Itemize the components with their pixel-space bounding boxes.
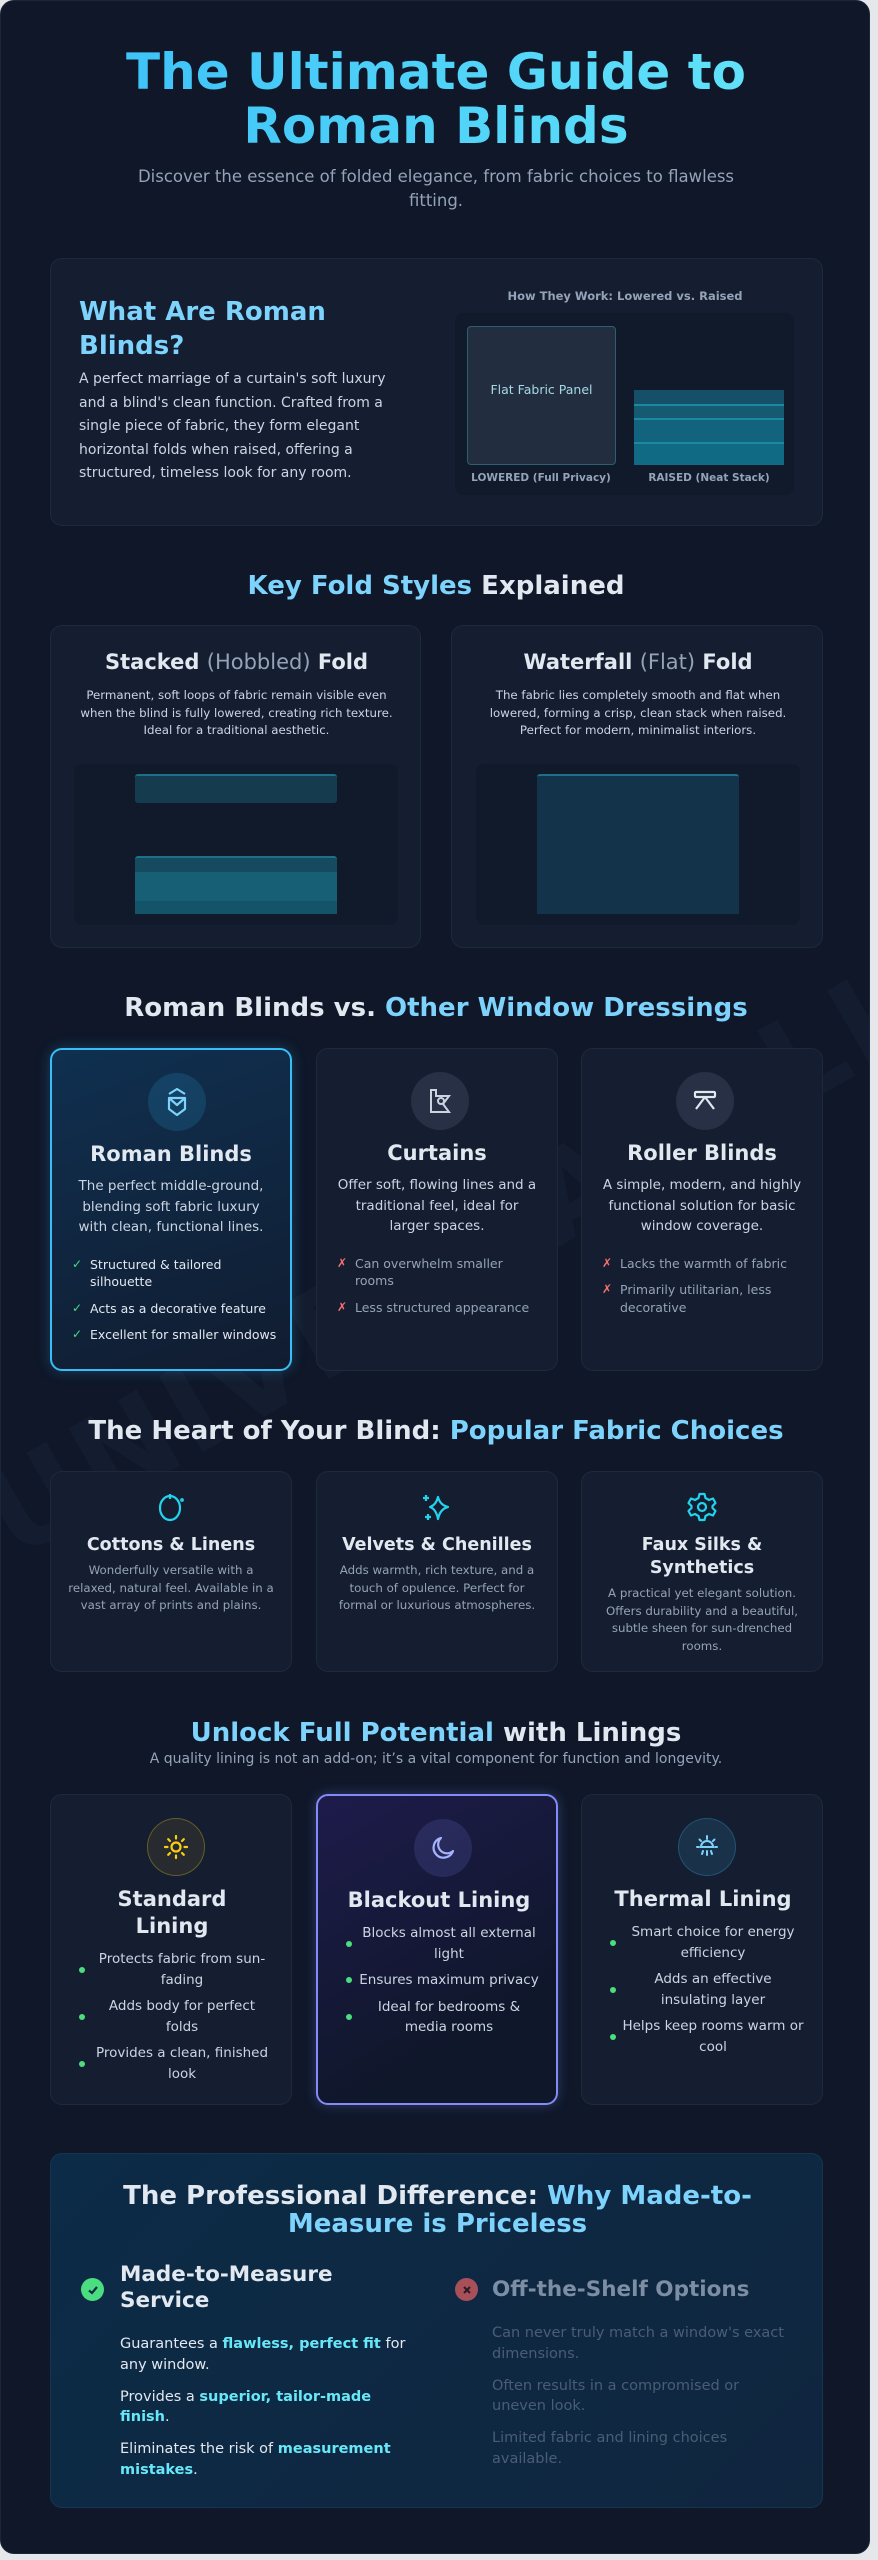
text: description: A perfect marriage of a curtain's soft luxury and a blind's clean function. Crafted from a single piece of fabric, they form elegant horizontal folds when raised, offering a structured, timeless look for any room.	[79, 371, 386, 481]
panel: curtains: Offer soft, flowing lines and a traditional feel, ideal for larger spaces.	[338, 1177, 536, 1234]
panel: curtains	[316, 1048, 558, 1371]
panel: thermal lining	[581, 1794, 823, 2105]
heading: linings: Unlock Full Potential with Linings	[191, 1718, 681, 1748]
panel: velvets: Velvets & Chenilles	[342, 1535, 532, 1555]
panel: faux silks	[581, 1471, 823, 1672]
subheading: linings: A quality lining is not an add-on; it’s a vital component for function and longevity.	[150, 1751, 722, 1767]
panel: roller blinds: Roller Blinds	[627, 1141, 777, 1165]
panel: thermal lining: Thermal Lining	[614, 1887, 792, 1911]
list: Provides a clean, finished look	[96, 2045, 268, 2082]
heading: Stacked (Hobbled) Fold	[105, 650, 368, 674]
description: The fabric lies completely smooth and flat when lowered, forming a crisp, clean stack when raised. Perfect for modern, minimalist interiors.	[490, 688, 786, 737]
diagram: waterfall	[476, 764, 800, 925]
diagram caption: How They Work: Lowered vs. Raised	[507, 289, 743, 303]
list: roller cons: Lacks the warmth of fabric	[620, 1256, 787, 1270]
list	[610, 1924, 804, 2054]
panel: cottons	[50, 1471, 292, 1672]
panel: stacked fold	[50, 625, 421, 948]
list: Adds body for perfect folds	[109, 1998, 255, 2034]
label raised: RAISED (Neat Stack)	[648, 472, 770, 484]
list: roller cons	[602, 1256, 787, 1314]
icon: cross	[455, 2278, 478, 2301]
list: curtains cons: ✗	[337, 1256, 347, 1270]
diagram: stacked	[74, 764, 398, 925]
list: Ideal for bedrooms & media rooms	[378, 1998, 520, 2035]
heading: what are roman blinds: What Are Roman Blinds?	[79, 297, 326, 361]
list: curtains cons: Less structured appearance	[355, 1300, 529, 1314]
panel: what are roman blinds	[50, 258, 823, 526]
subtitle: Discover the essence of folded elegance, from fabric choices to flawless fitting.	[138, 167, 734, 210]
list: Ensures maximum privacy	[359, 1972, 539, 1988]
heading: key fold styles: Key Fold Styles Explained	[248, 571, 624, 601]
icon: gear	[687, 1492, 717, 1522]
list: roller cons: ✗	[602, 1256, 612, 1270]
panel: cottons: Cottons & Linens	[87, 1535, 255, 1555]
panel: professional difference: Guarantees a flawless, perfect fit for any window.	[120, 2336, 405, 2372]
panel: professional difference: Often results in a compromised or uneven look.	[492, 2378, 739, 2414]
list: Blocks almost all external light	[362, 1925, 536, 1962]
title: The Ultimate Guide to	[126, 43, 746, 101]
panel: waterfall fold	[451, 625, 823, 948]
icon: sun	[147, 1818, 205, 1876]
icon: thermal	[678, 1818, 736, 1876]
lowered panel: Flat Fabric Panel	[490, 382, 592, 397]
icon: roller	[676, 1072, 734, 1130]
list: roman pros: ✓	[72, 1327, 82, 1341]
panel: roman blinds: Roman Blinds	[90, 1142, 252, 1166]
list: roman pros: Structured & tailored silhouette	[90, 1256, 221, 1289]
panel: velvets	[316, 1471, 558, 1672]
panel: faux silks: A practical yet elegant solution. Offers durability and a beautiful, subtle sheen for sun-drenched rooms.	[606, 1586, 798, 1652]
title	[1, 45, 871, 153]
panel: professional difference: Limited fabric and lining choices available.	[492, 2430, 727, 2466]
list: roman pros: ✓	[72, 1256, 82, 1270]
panel: professional difference: Made-to-Measure Service	[120, 2262, 333, 2313]
list: curtains cons	[337, 1256, 529, 1314]
list: roller cons: ✗	[602, 1282, 612, 1296]
panel: roman blinds	[50, 1048, 292, 1371]
lowered panel	[467, 326, 616, 465]
list: roman pros	[72, 1256, 276, 1342]
list: roman pros: Acts as a decorative feature	[90, 1300, 266, 1316]
icon: curtains	[411, 1072, 469, 1130]
list: Protects fabric from sun-fading	[99, 1951, 265, 1988]
column: made-to-measure	[81, 2262, 406, 2478]
panel: cottons: Wonderfully versatile with a relaxed, natural feel. Available in a vast array of prints and plains.	[68, 1563, 274, 1612]
list: Smart choice for energy efficiency	[631, 1924, 795, 1960]
panel: blackout lining: Blackout Lining	[348, 1888, 530, 1912]
heading: fabric choices: The Heart of Your Blind: Popular Fabric Choices	[88, 1416, 784, 1446]
panel: professional difference: Off-the-Shelf Options	[492, 2277, 749, 2302]
heading: Waterfall (Flat) Fold	[523, 650, 753, 674]
list: curtains cons: Can overwhelm smaller rooms	[355, 1256, 503, 1288]
list: Adds an effective insulating layer	[654, 1971, 772, 2008]
label lowered: LOWERED (Full Privacy)	[471, 472, 611, 484]
list	[79, 1951, 268, 2082]
list: curtains cons: ✗	[337, 1300, 347, 1314]
column: off-the-shelf	[455, 2277, 784, 2466]
panel: professional difference: Provides a superior, tailor-made finish.	[120, 2388, 371, 2425]
icon: moon	[414, 1819, 472, 1877]
panel: velvets: Adds warmth, rich texture, and a touch of opulence. Perfect for formal or luxurious atmospheres.	[339, 1563, 535, 1612]
panel: professional difference: Eliminates the risk of measurement mistakes.	[120, 2441, 391, 2478]
icon: cotton	[158, 1494, 184, 1522]
list: roller cons: Primarily utilitarian, less decorative	[620, 1282, 771, 1314]
panel: blackout lining	[316, 1794, 558, 2105]
description: Permanent, soft loops of fabric remain visible even when the blind is fully lowered, creating rich texture. Ideal for a traditional aesthetic.	[80, 688, 393, 737]
list	[346, 1925, 539, 2035]
panel: professional difference	[50, 2153, 823, 2508]
list: roman pros: ✓	[72, 1300, 82, 1314]
panel: roller blinds: A simple, modern, and highly functional solution for basic window coverage.	[603, 1177, 801, 1234]
heading: The Professional Difference: Why Made-to-Measure is Priceless	[123, 2181, 752, 2239]
diagram: lowered vs raised	[455, 313, 794, 495]
icon: check	[81, 2278, 104, 2301]
raised stack	[634, 390, 784, 465]
heading: vs other window dressings: Roman Blinds vs. Other Window Dressings	[124, 993, 748, 1023]
list: roman pros: Excellent for smaller windows	[90, 1327, 276, 1342]
panel: standard lining: Standard Lining	[118, 1887, 226, 1938]
panel: faux silks: Faux Silks & Synthetics	[642, 1535, 762, 1578]
panel: roller blinds	[581, 1048, 823, 1371]
icon: roman blind	[148, 1073, 206, 1131]
panel: professional difference: Can never truly match a window's exact dimensions.	[492, 2325, 784, 2362]
list: Helps keep rooms warm or cool	[622, 2018, 804, 2054]
icon: sparkle	[423, 1495, 450, 1520]
panel: roman blinds: The perfect middle-ground, blending soft fabric luxury with clean, functional lines.	[78, 1178, 263, 1235]
title: Roman Blinds	[243, 97, 629, 155]
panel: curtains: Curtains	[387, 1141, 487, 1165]
panel: standard lining	[50, 1794, 292, 2105]
